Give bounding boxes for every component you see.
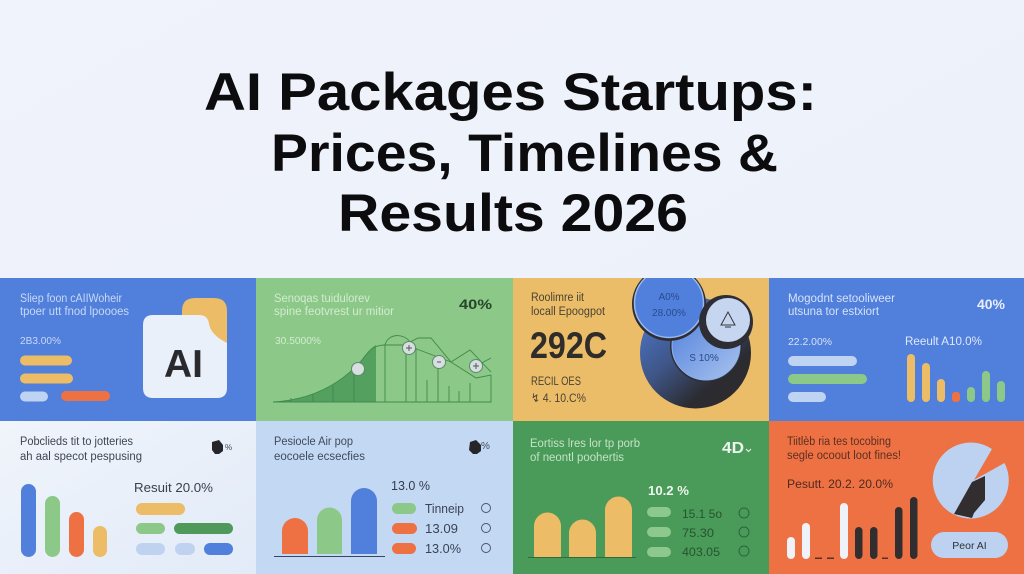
icon: badge percent — [469, 440, 490, 454]
value label: 10.2 % — [648, 483, 689, 498]
title: Prices, Timelines & — [271, 124, 778, 183]
panel text: spine feotvrest ur mitior — [274, 306, 394, 318]
panel text: eocoele ecsecfies — [274, 451, 365, 463]
panel: AI package card — [0, 278, 256, 421]
mini bar chart — [787, 497, 918, 559]
panel: blue bars — [769, 278, 1024, 421]
donut diagram: A0% — [658, 292, 680, 303]
button — [931, 532, 1008, 558]
legend rows: 403.05 — [682, 545, 720, 559]
legend rows — [392, 502, 490, 556]
stat: 4D — [722, 440, 751, 457]
mini bar chart — [907, 354, 1005, 402]
panel text — [787, 436, 901, 462]
panel text: utsuna tor estxiort — [788, 306, 880, 318]
panel text: Eortiss lres lor tp porb — [530, 438, 640, 450]
stat: 40%: 40% — [459, 296, 493, 312]
panel text: segle ocoout loot fines! — [787, 450, 901, 462]
panel text — [20, 293, 129, 318]
percentage label: 30.5000% — [275, 336, 321, 347]
panel text: Pobclieds tit to jotteries — [20, 436, 133, 448]
panel text — [531, 292, 606, 318]
legend rows: 13.0% — [425, 542, 461, 556]
result labels: RECIL OES — [531, 376, 581, 388]
title: AI Packages Startups: — [204, 63, 817, 122]
legend rows — [647, 507, 749, 559]
legend rows: Tinneip — [425, 502, 464, 516]
donut diagram: 28.00% — [652, 308, 686, 319]
donut diagram: S 10% — [689, 353, 719, 364]
chart markers — [352, 342, 482, 376]
progress bars — [788, 356, 867, 402]
result label: Resuit 20.0% — [134, 480, 213, 495]
percentage label: 22.2.00% — [788, 337, 832, 348]
column chart — [274, 488, 385, 557]
panel text: of neontl poohertis — [530, 452, 624, 464]
pie chart — [933, 443, 1009, 519]
vertical bars — [21, 484, 107, 557]
percentage label: 2B3.00% — [20, 335, 61, 347]
panel text: tpoer utt fnod lpoooes — [20, 306, 129, 318]
stat: 40%: 40% — [977, 296, 1006, 312]
panel: dark green chart — [513, 421, 769, 574]
panel text: Sliep foon cAIIWoheir — [20, 293, 122, 305]
icon: badge percent: % — [481, 441, 490, 452]
panel text: ah aal specot pespusing — [20, 451, 142, 463]
stat: 4D: 4D — [722, 440, 744, 457]
icon: AI document — [143, 298, 227, 398]
value label: 13.0 % — [391, 478, 430, 493]
button: Peor AI — [952, 540, 987, 552]
legend rows: 75.30 — [682, 526, 714, 540]
panel text: Tiitlèb ria tes tocobing — [787, 436, 891, 448]
panel text — [274, 436, 365, 463]
column chart — [528, 496, 636, 558]
icon: badge percent: % — [225, 443, 232, 452]
big number: 292C — [530, 325, 607, 366]
legend rows: 13.09 — [425, 522, 458, 536]
panel: orange chart — [769, 421, 1024, 574]
pill rows — [136, 503, 233, 555]
panel text: locall Epoogpot — [531, 306, 606, 318]
donut diagram — [632, 267, 753, 408]
panel text — [20, 436, 142, 463]
icon: badge percent — [212, 440, 232, 454]
panel text: Senoqas tuidulorev — [274, 293, 370, 305]
title — [204, 63, 817, 243]
panel text: Roolimre iit — [531, 292, 585, 304]
result labels — [531, 376, 586, 405]
panel: pale blue chart — [256, 421, 513, 574]
result label: Reeult A10.0% — [905, 336, 982, 348]
panel: growth chart — [256, 278, 513, 421]
panel: light bars — [0, 421, 256, 574]
result labels: ↯ 4. 10.C% — [531, 391, 586, 405]
legend rows: 15.1 5o — [682, 507, 722, 521]
panel text — [530, 438, 640, 464]
progress bars — [20, 356, 110, 402]
panel: yellow donut stats — [513, 267, 769, 421]
panel text: Pesiocle Air pop — [274, 436, 353, 448]
icon: AI document: AI — [164, 343, 203, 386]
panel text — [788, 293, 895, 318]
title: Results 2026 — [338, 184, 688, 243]
result label: Pesutt. 20.2. 20.0% — [787, 477, 893, 491]
panel text — [274, 293, 394, 318]
area chart — [273, 336, 491, 402]
panel text: Mogodnt setooliweer — [788, 293, 895, 305]
